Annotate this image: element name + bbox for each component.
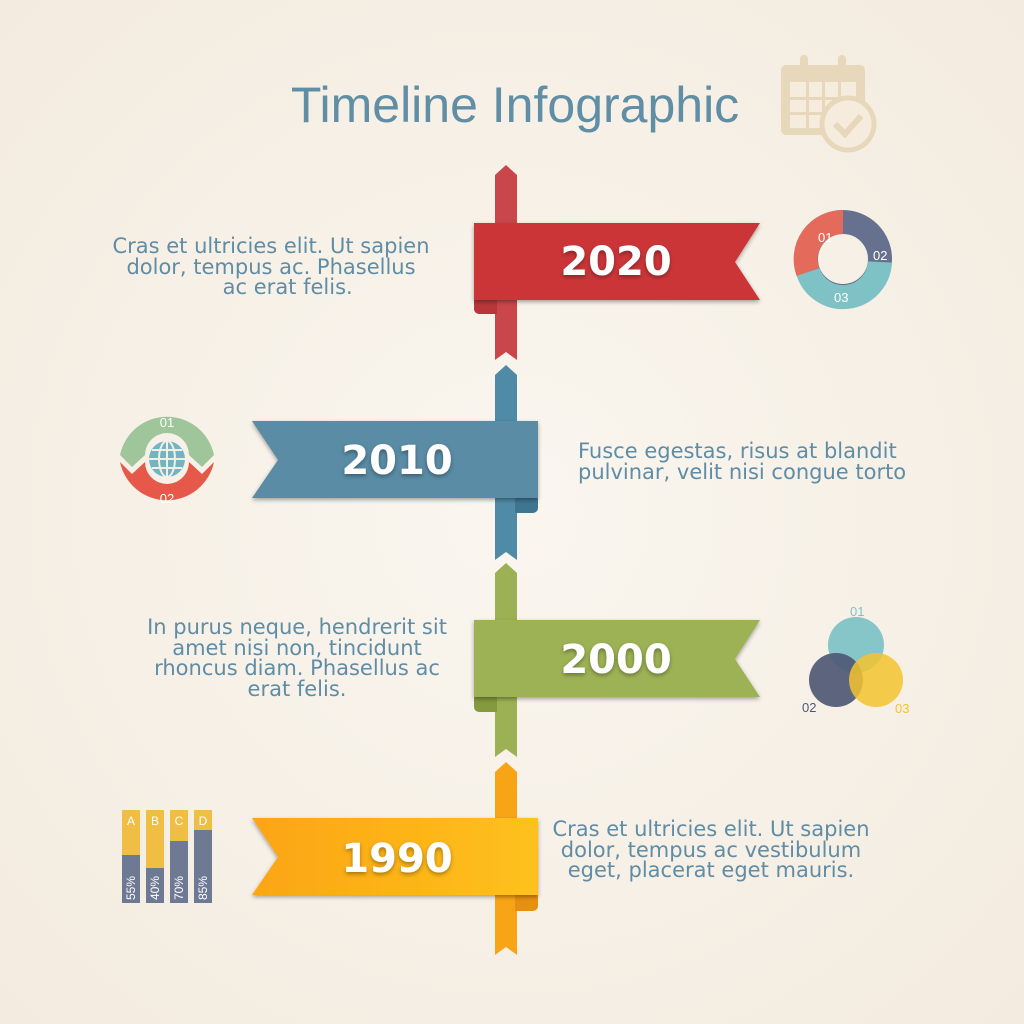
icon: venn circles: 01 [850,604,864,619]
bar chart: B [151,814,159,828]
text: 2010 [578,439,906,484]
text: 2020: Cras et ultricies elit. Ut sapien [112,234,430,258]
text: 2010: pulvinar, velit nisi congue torto [578,460,906,484]
icon: venn circles: 02 [802,700,816,715]
text: 2010: Fusce egestas, risus at blandit [578,439,897,463]
flag: 2010 [252,421,538,513]
flag: 2020 [474,223,760,314]
text: 2000 [147,615,447,700]
text: 2020 [112,234,430,299]
flag: 2000: 2000 [560,637,672,683]
icon: venn circles [802,604,909,716]
bar chart: 85% [196,876,210,900]
timeline strips [495,165,517,955]
flag: 2020: 2020 [560,239,672,285]
text: 1990: eget, placerat eget mauris. [568,858,854,882]
flag: 1990 [252,818,538,911]
icon: globe cycle: 01 [160,415,174,430]
text: 2020: ac erat felis. [223,275,353,299]
text: 2000: erat felis. [248,676,346,700]
icon: globe cycle [120,415,214,506]
icon: calendar [781,55,874,150]
text: 2000: In purus neque, hendrerit sit [147,615,447,639]
text: 2000: amet nisi non, tincidunt [172,636,422,660]
bar chart [122,810,212,903]
icon: venn circles: 03 [895,701,909,716]
icon: donut chart: 02 [873,248,887,263]
icon: donut chart: 03 [834,290,848,305]
bar chart: C [175,814,184,828]
bar chart: D [199,814,208,828]
flag: 2000 [474,620,760,712]
bar chart: 40% [148,876,162,900]
flag: 2010: 2010 [341,438,453,484]
text: 1990 [552,817,870,882]
text: 1990: Cras et ultricies elit. Ut sapien [552,817,870,841]
icon: donut chart: 01 [818,230,832,245]
bar chart: 70% [172,876,186,900]
text: 2000: rhoncus diam. Phasellus ac [154,656,440,680]
icon: donut chart [806,222,887,305]
title: Timeline Infographic [291,77,739,133]
flag: 1990: 1990 [341,836,453,882]
bar chart: 55% [124,876,138,900]
text: 1990: dolor, tempus ac vestibulum [561,838,861,862]
icon: globe cycle: 02 [160,491,174,506]
bar chart: A [127,814,135,828]
text: 2020: dolor, tempus ac. Phasellus [126,254,416,278]
